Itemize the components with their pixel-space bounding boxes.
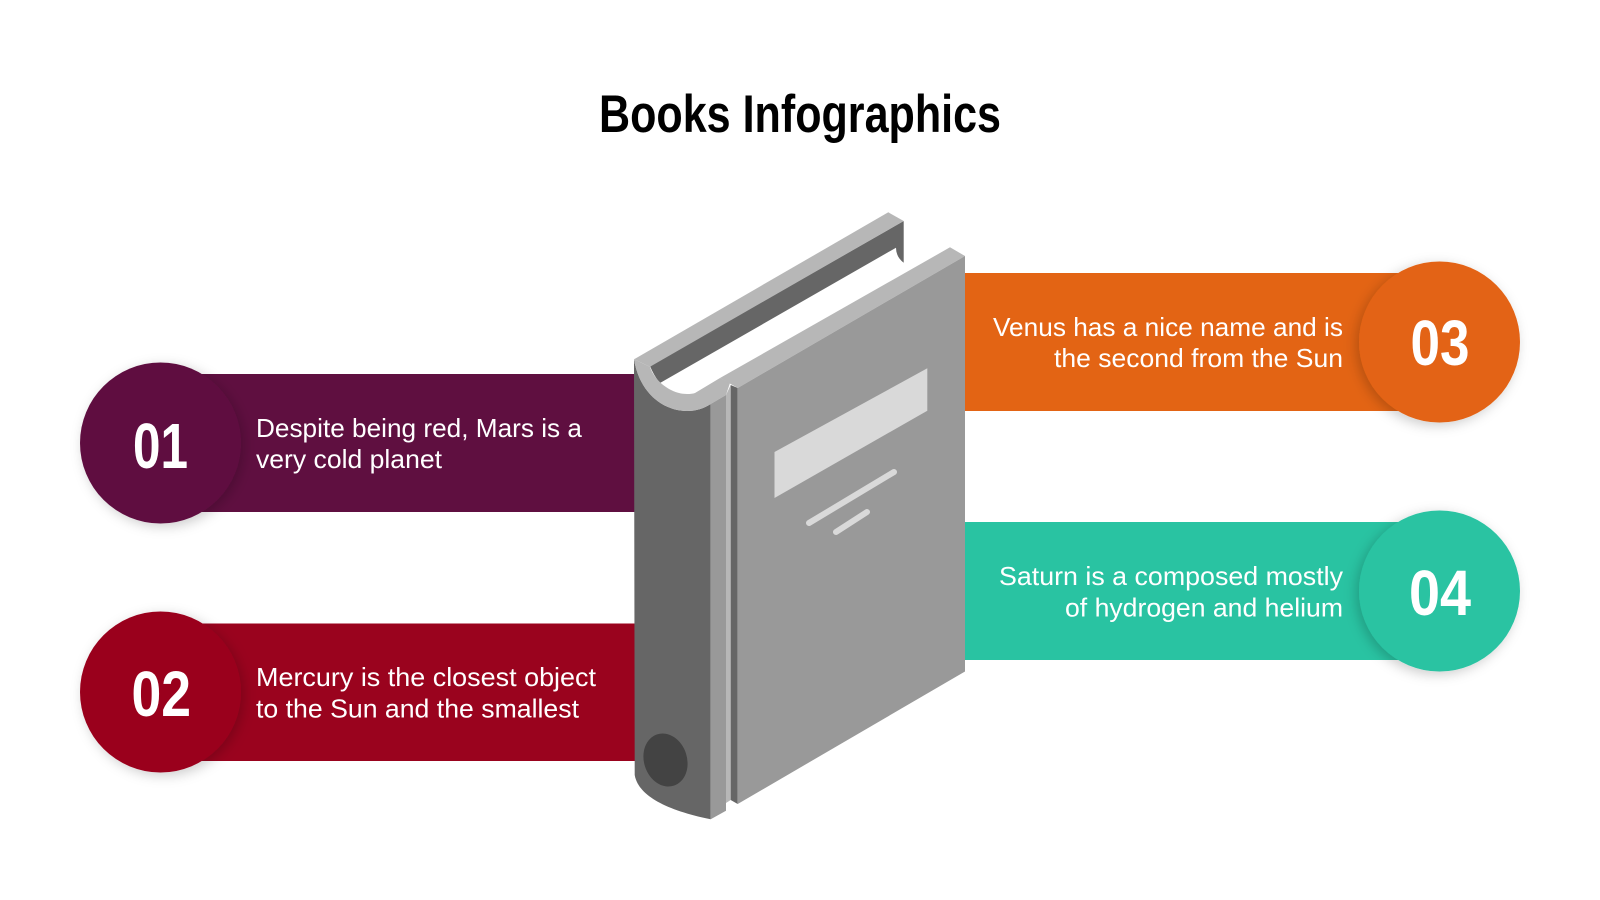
text 03: the second from the Sun [1054,343,1343,373]
spine hole [637,728,694,792]
back cover top edge [634,212,904,367]
front cover face [738,256,965,804]
text 04: of hydrogen and helium [1065,592,1343,622]
spine top curve [634,359,730,411]
back cover inside [650,221,904,383]
text 02: to the Sun and the smallest [256,694,580,724]
cover line long [809,472,894,523]
hinge light strip [726,385,731,803]
circle 04 [1359,510,1520,672]
spine hinge [711,395,726,819]
text 02: Mercury is the closest object [256,662,597,692]
item 04: Saturn [960,510,1520,672]
cover line short [836,512,867,532]
circle 03 [1359,262,1520,422]
number 02: 02 [132,658,191,730]
circle 01 [80,362,241,524]
item 02: Mercury [80,612,635,772]
number 03: 03 [1410,307,1470,379]
band 01 [160,374,635,512]
item 03: Venus [960,262,1520,422]
text 01: very cold planet [256,444,443,474]
band 04 [960,522,1440,660]
circle 02 [80,612,241,772]
band 02 [160,624,635,761]
cover label [774,368,927,498]
item 01: Mars [80,362,635,524]
book illustration [634,212,965,819]
title: Books Infographics [599,85,1001,144]
number 01: 01 [133,410,188,482]
number 04: 04 [1409,557,1471,629]
front cover top edge [720,247,965,388]
front cover edge [731,385,738,804]
text 01: Despite being red, Mars is a [256,413,583,443]
text 04: Saturn is a composed mostly [999,561,1343,591]
spine face [634,359,711,819]
band 03 [960,273,1440,411]
text 03: Venus has a nice name and is [993,312,1343,342]
